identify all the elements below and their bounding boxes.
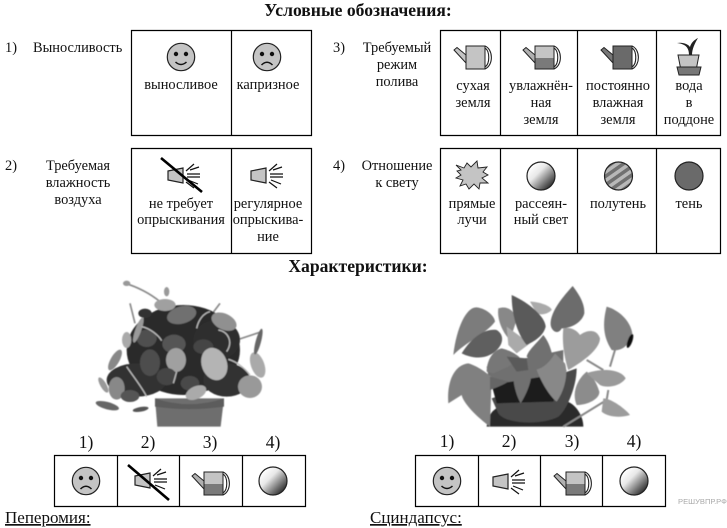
icon: no spray	[128, 465, 169, 500]
text: direct rays: лучи	[457, 212, 487, 228]
text: wet soil: постоянно	[586, 78, 650, 94]
text: wet soil: влажная	[593, 95, 644, 111]
text: regular spraying: опрыскива-	[233, 212, 304, 228]
icon: can moist	[192, 472, 229, 495]
icon: can wet	[601, 46, 638, 69]
text: water in tray: вода	[675, 78, 703, 94]
text: no spraying: не требует	[149, 196, 214, 212]
column numbers: 1)	[440, 431, 454, 451]
watermark: РЕШУВПР.РФ	[678, 497, 727, 506]
text: no spraying: опрыскивания	[137, 212, 225, 228]
icon: happy face	[167, 43, 195, 71]
icon: dark circle	[675, 162, 703, 190]
text: diffuse light: рассеян-	[515, 196, 567, 212]
photo: scindapsus	[448, 286, 635, 427]
text: regular spraying	[233, 196, 304, 245]
column numbers: 3)	[565, 431, 579, 451]
text: moist soil: ная	[531, 95, 552, 111]
text: no spraying	[137, 196, 225, 228]
text: dry soil: сухая	[456, 78, 490, 94]
text: diffuse light	[514, 196, 569, 228]
column numbers: 2)	[502, 431, 516, 451]
text: regular spraying: регулярное	[234, 196, 302, 212]
legend 2: air humidity: воздуха	[54, 192, 102, 208]
text: part shade: полутень	[590, 196, 646, 212]
icon: gradient circle	[527, 162, 555, 190]
text: direct rays: прямые	[449, 196, 495, 212]
chart: peperomia characteristics	[54, 432, 306, 507]
icon: can dry	[454, 46, 491, 69]
table: endurance	[132, 30, 312, 136]
title: Условные обозначения:	[264, 0, 452, 20]
table: watering	[440, 30, 720, 136]
legend 3: watering	[333, 30, 720, 136]
text: dry soil: земля	[456, 95, 491, 111]
text: wet soil	[586, 78, 650, 128]
icon: can moist	[554, 472, 591, 495]
legend 3: watering: режим	[377, 57, 417, 73]
icon: can moist	[523, 46, 560, 69]
label: humidity: 2)	[5, 158, 17, 174]
column numbers: 2)	[141, 432, 155, 452]
chart: scindapsus characteristics	[416, 431, 666, 507]
legend 3: watering: полива	[376, 74, 419, 90]
name: scindapsus: Сциндапсус:	[370, 508, 462, 527]
text: moist soil	[509, 78, 573, 128]
text: hardy: выносливое	[144, 77, 218, 93]
text: dry soil	[456, 78, 491, 111]
legend 4: light: к свету	[375, 175, 419, 191]
table	[54, 455, 306, 507]
icon: sad face	[253, 43, 281, 71]
text: diffuse light: ный свет	[514, 212, 569, 228]
table: humidity	[132, 148, 312, 254]
legend 2: air humidity: влажность	[46, 175, 111, 191]
name: peperomia: Пеперомия:	[5, 508, 91, 527]
text: capricious: капризное	[237, 77, 299, 93]
column numbers	[440, 431, 641, 451]
icon: pot in tray	[677, 38, 701, 75]
legend 4: light	[333, 148, 720, 254]
column numbers: 4)	[627, 431, 641, 451]
column numbers: 3)	[203, 432, 217, 452]
icon: no spray	[161, 158, 202, 192]
icon: burst	[456, 161, 488, 189]
icon: spray	[251, 164, 283, 188]
legend 1: endurance	[5, 30, 312, 136]
text: regular spraying: ние	[257, 229, 279, 245]
icon: gradient circle	[620, 467, 648, 495]
label: light: 4)	[333, 158, 345, 174]
table	[416, 455, 666, 507]
text: water in tray: в	[686, 95, 693, 111]
label: watering: 3)	[333, 40, 345, 56]
column numbers: 1)	[79, 432, 93, 452]
text: moist soil: земля	[524, 112, 559, 128]
heading: characteristics: Характеристики:	[288, 256, 428, 276]
icon: spray	[493, 470, 525, 494]
text: water in tray	[664, 78, 714, 128]
label: endurance: 1)	[5, 40, 17, 56]
icon: sad face	[72, 467, 100, 495]
icon: happy face	[433, 467, 461, 495]
column numbers: 4)	[266, 432, 280, 452]
text: shade: тень	[676, 196, 703, 212]
photo: peperomia	[95, 281, 268, 427]
legend 2: air humidity	[5, 148, 312, 254]
legend 2: air humidity: Требуемая	[46, 158, 110, 174]
text: water in tray: поддоне	[664, 112, 714, 128]
legend 3: watering: Требуемый	[363, 40, 432, 56]
text: moist soil: увлажнён-	[509, 78, 573, 94]
icon: striped circle	[604, 162, 632, 190]
table: light	[440, 148, 720, 254]
legend 4: light: Отношение	[362, 158, 432, 174]
legend 1: endurance: Выносливость	[33, 40, 123, 56]
icon: gradient circle	[259, 467, 287, 495]
text: wet soil: земля	[601, 112, 636, 128]
text: direct rays	[449, 196, 495, 228]
column numbers	[79, 432, 280, 452]
